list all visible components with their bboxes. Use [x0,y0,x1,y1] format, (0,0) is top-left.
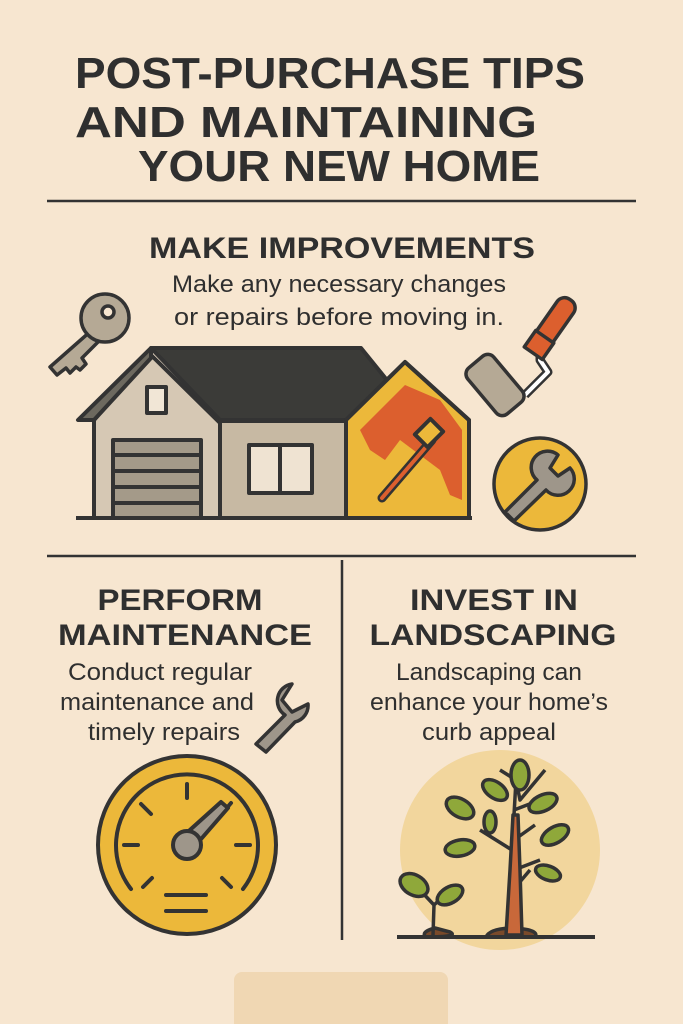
heading: make improvements: MAKE IMPROVEMENTS [149,232,535,265]
icon: wrench [256,684,308,752]
icon: key [50,294,129,375]
heading: invest in landscaping [370,584,616,652]
icon: gauge [98,756,276,934]
text: maintenance: maintenance and [60,689,254,716]
heading: perform maintenance [58,584,312,652]
text: maintenance [60,659,254,746]
title: AND MAINTAINING [75,98,537,147]
text: landscaping: enhance your home’s [370,689,608,716]
heading: invest in landscaping: INVEST IN [410,584,578,617]
title [75,49,585,191]
icon: paint roller [463,294,579,419]
icon: wrench circle [494,438,586,530]
text: make improvements [172,271,506,331]
heading: perform maintenance: PERFORM [98,584,262,617]
text: landscaping [370,659,608,746]
title: POST-PURCHASE TIPS [75,49,585,98]
illustration: house [76,348,472,518]
title: YOUR NEW HOME [138,142,540,191]
text: maintenance: timely repairs [88,719,240,746]
icon: tree [396,750,600,950]
text: make improvements: or repairs before moving in. [174,304,504,331]
text: landscaping: curb appeal [422,719,556,746]
text: landscaping: Landscaping can [396,659,582,686]
heading: perform maintenance: MAINTENANCE [58,619,312,652]
text: maintenance: Conduct regular [68,659,252,686]
heading: invest in landscaping: LANDSCAPING [370,619,616,652]
text: make improvements: Make any necessary changes [172,271,506,298]
footer box [234,972,448,1024]
